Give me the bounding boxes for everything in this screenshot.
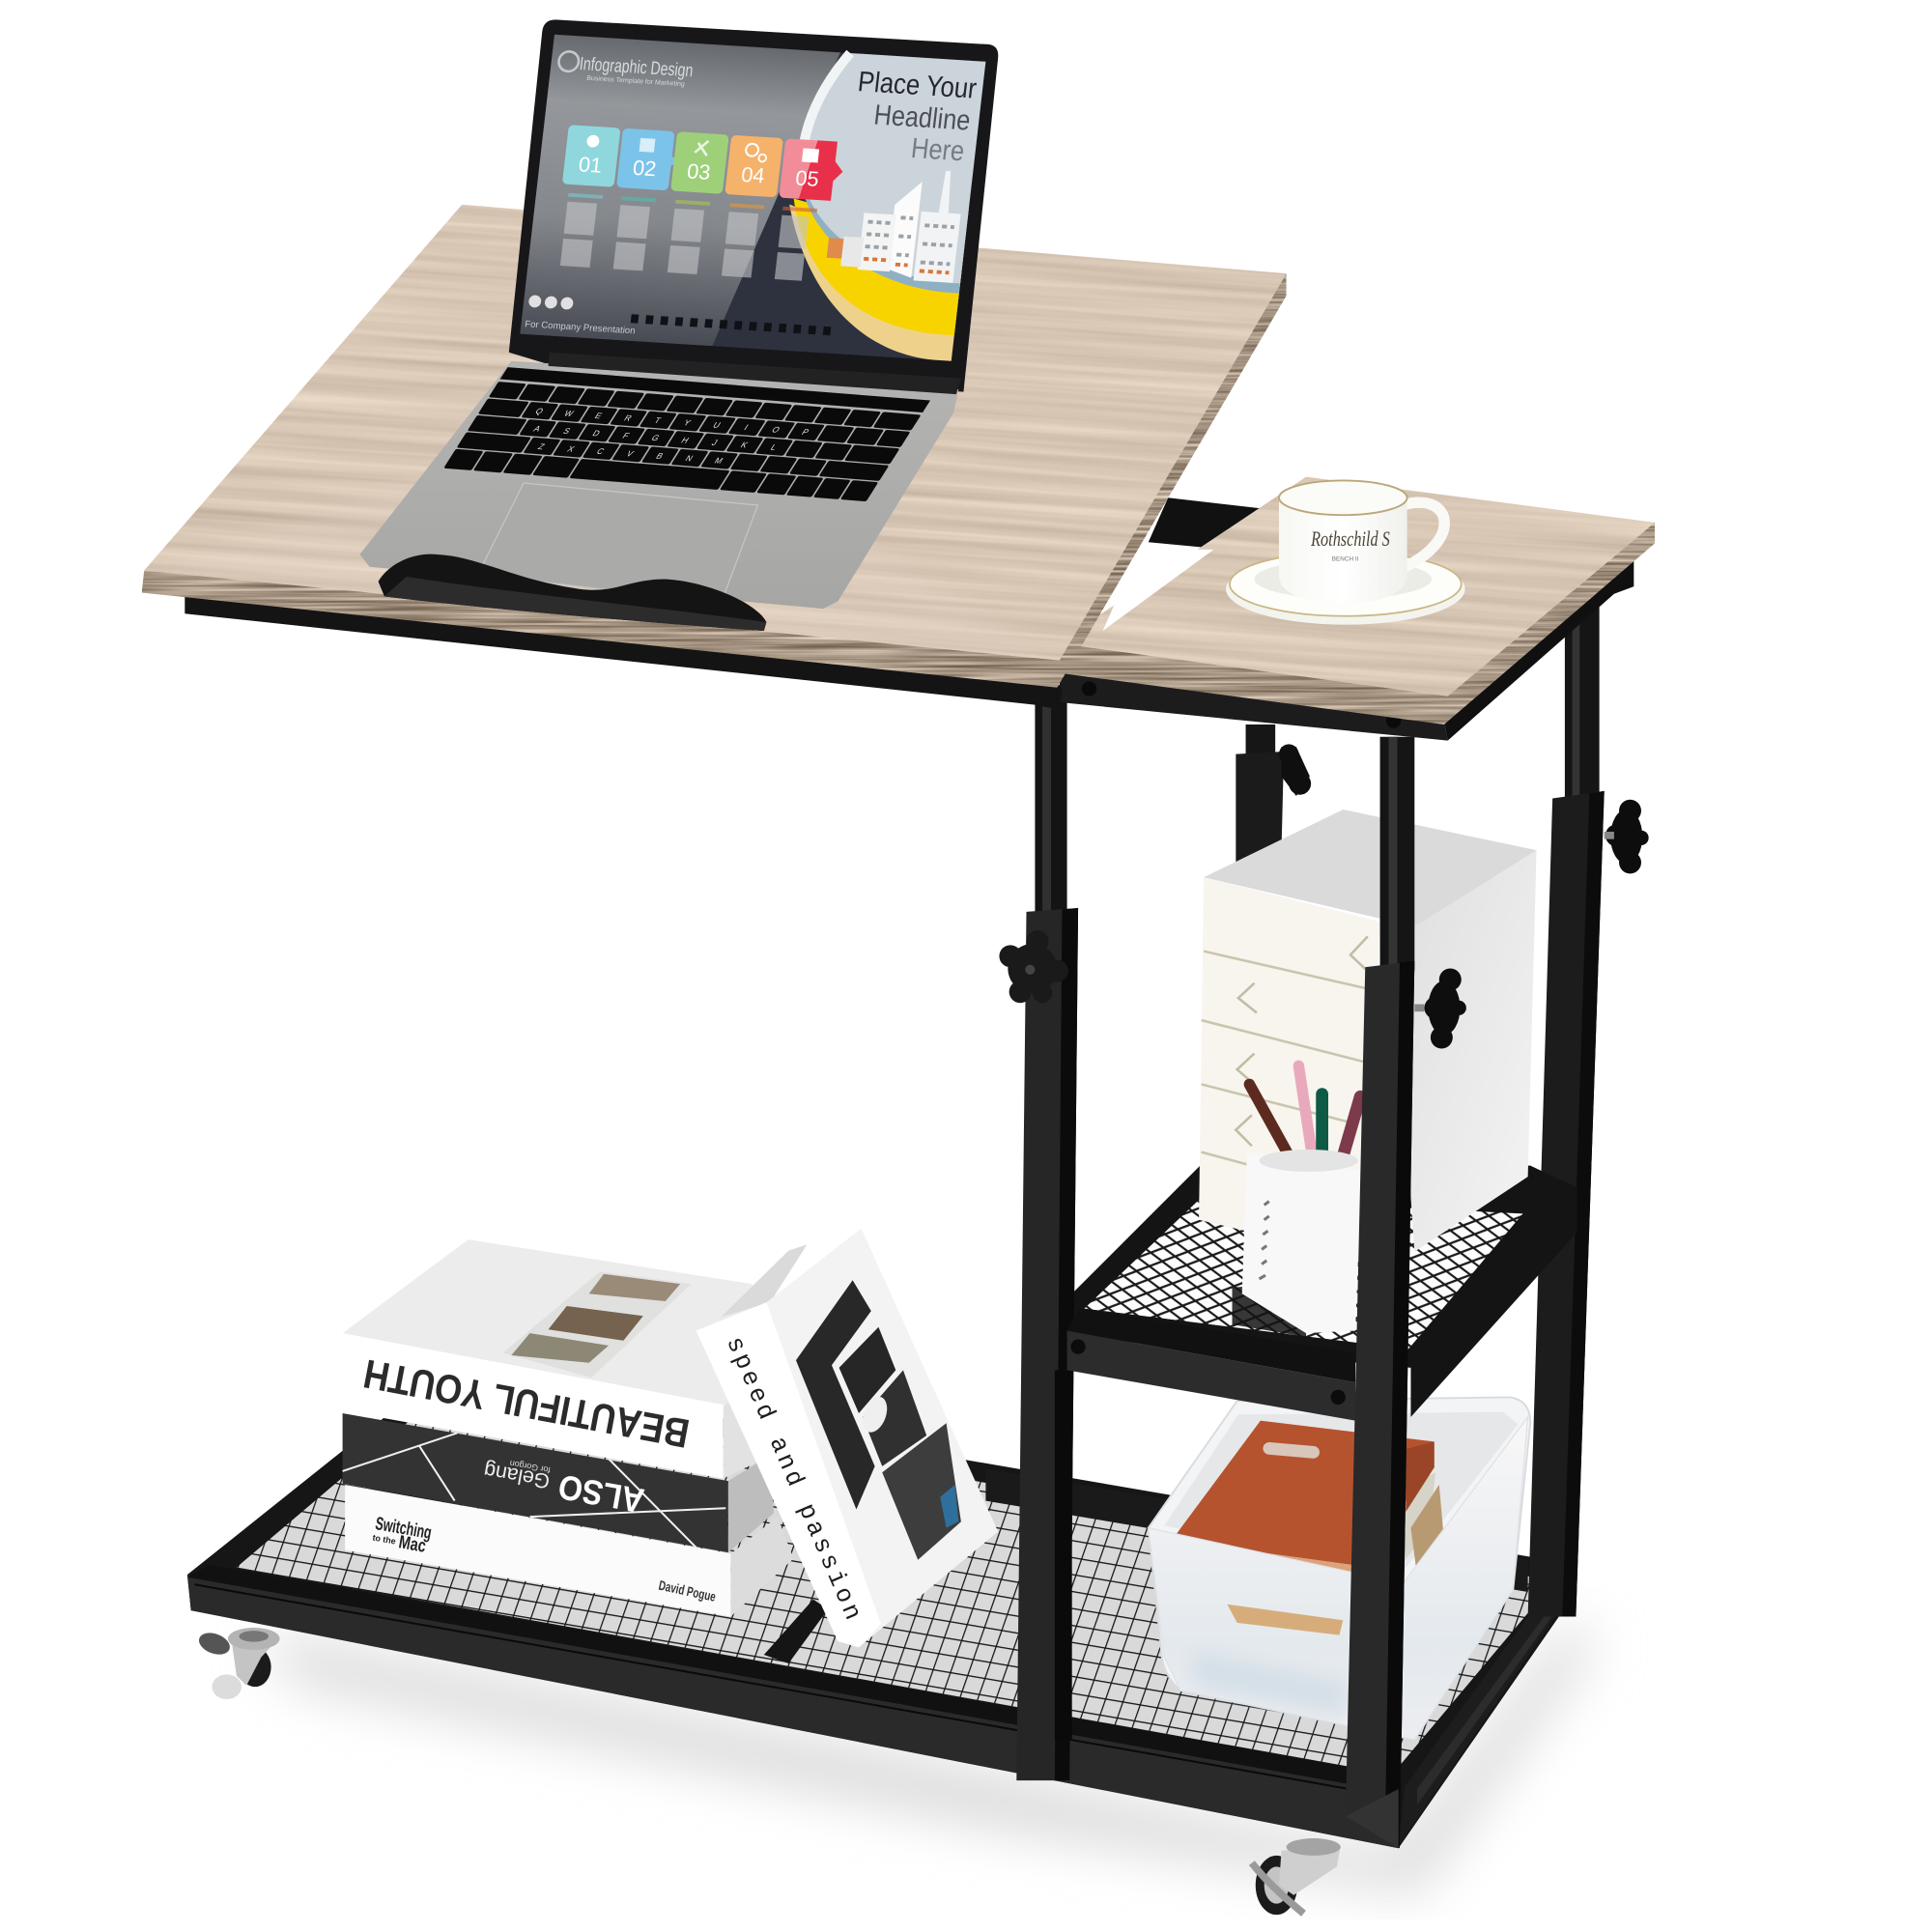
cup body: Rothschild S bbox=[1310, 527, 1390, 551]
screen step tiles bbox=[562, 125, 846, 201]
book: Switching to the Mac: Mac bbox=[397, 1532, 428, 1557]
key legends: QWERTYUIOP bbox=[533, 407, 810, 437]
bin handle bbox=[1227, 1605, 1343, 1635]
floor shadow bbox=[259, 1614, 1589, 1891]
knob: front left bbox=[999, 930, 1068, 1003]
screen footer: For Company Presentation bbox=[525, 319, 636, 336]
cup handle bbox=[1400, 502, 1444, 569]
screen step tiles: 02 bbox=[632, 156, 658, 181]
screen headline panel: Headline bbox=[872, 99, 972, 137]
screen title: Business Template for Marketing bbox=[586, 75, 685, 88]
keyboard bbox=[443, 367, 930, 501]
coffee cup and saucer bbox=[1226, 480, 1465, 625]
key legends bbox=[512, 407, 810, 470]
laptop stand bbox=[379, 554, 766, 631]
rust box in bin bbox=[1172, 1421, 1435, 1573]
screen headline panel: Here bbox=[909, 132, 966, 167]
storage bin bbox=[1149, 1397, 1530, 1740]
product illustration: adjustable laptop table bbox=[141, 19, 1655, 1917]
middle shelf front bar bbox=[1067, 1309, 1355, 1421]
screen step tiles: 04 bbox=[740, 162, 766, 187]
left caster bbox=[196, 1628, 280, 1699]
book: speed and passion bbox=[696, 1229, 998, 1647]
screen headline panel: Place Your bbox=[856, 66, 979, 105]
knob: front right bbox=[1414, 969, 1466, 1048]
book: Switching to the Mac bbox=[345, 1485, 793, 1616]
book: ALSO Gelang: ALSO bbox=[555, 1467, 647, 1520]
screen step tiles: 01 bbox=[578, 152, 604, 178]
bottom frame front bar bbox=[187, 1565, 1399, 1848]
book: Beautiful Youth bbox=[343, 1239, 788, 1479]
book: Switching to the Mac: to the bbox=[372, 1533, 397, 1547]
bottom mesh shelf bbox=[187, 1370, 1562, 1848]
small tabletop bbox=[1057, 477, 1655, 741]
screen text columns bbox=[560, 193, 817, 281]
large tilting tabletop bbox=[141, 205, 1287, 708]
screen title: Infographic Design bbox=[579, 54, 695, 81]
screen headline panel bbox=[773, 50, 985, 361]
book stack bbox=[343, 1229, 998, 1647]
knob: back left bbox=[1279, 744, 1311, 796]
screen step tiles: 05 bbox=[794, 165, 820, 191]
key legends: ZXCVBNM bbox=[536, 442, 724, 466]
front right leg bbox=[1346, 737, 1414, 1848]
laptop lid bbox=[509, 19, 998, 392]
laptop base bbox=[359, 353, 961, 609]
small top support bbox=[1060, 560, 1634, 741]
book: Switching to the Mac: David Pogue bbox=[657, 1577, 718, 1605]
white gap between tops bbox=[1103, 550, 1213, 631]
book: ALSO Gelang: for Gorgon bbox=[509, 1459, 552, 1475]
pens bbox=[1249, 1065, 1360, 1164]
laptop bbox=[359, 19, 998, 631]
cup body: BENCH II bbox=[1332, 555, 1359, 562]
key legends: ASDFGHJKL bbox=[532, 424, 779, 452]
book: Switching to the Mac: Switching bbox=[374, 1514, 433, 1544]
knob: back right bbox=[1605, 800, 1649, 873]
rear crossbar between tops bbox=[1149, 497, 1275, 549]
pen holder with pens bbox=[1242, 1065, 1361, 1333]
screen title bbox=[556, 51, 695, 89]
middle mesh shelf bbox=[1072, 1164, 1577, 1417]
laptop screen bbox=[520, 35, 985, 361]
screen footer bbox=[525, 295, 833, 349]
book: ALSO Gelang: Gelang bbox=[482, 1459, 552, 1493]
right caster bbox=[1252, 1838, 1341, 1915]
top underside bar bbox=[185, 595, 1062, 710]
book: Beautiful Youth: BEAUTIFUL YOUTH bbox=[360, 1350, 693, 1457]
book: speed and passion: speed and passion bbox=[720, 1332, 867, 1624]
front left leg bbox=[1016, 699, 1078, 1780]
back left leg bbox=[1236, 724, 1284, 875]
screen city skyline bbox=[825, 164, 966, 283]
book: ALSO Gelang bbox=[343, 1413, 774, 1552]
drawer box on middle shelf bbox=[1199, 810, 1537, 1260]
cup body bbox=[1279, 480, 1407, 604]
back right leg bbox=[1528, 591, 1605, 1616]
screen step tiles: 03 bbox=[686, 158, 712, 185]
saucer bbox=[1226, 552, 1465, 625]
